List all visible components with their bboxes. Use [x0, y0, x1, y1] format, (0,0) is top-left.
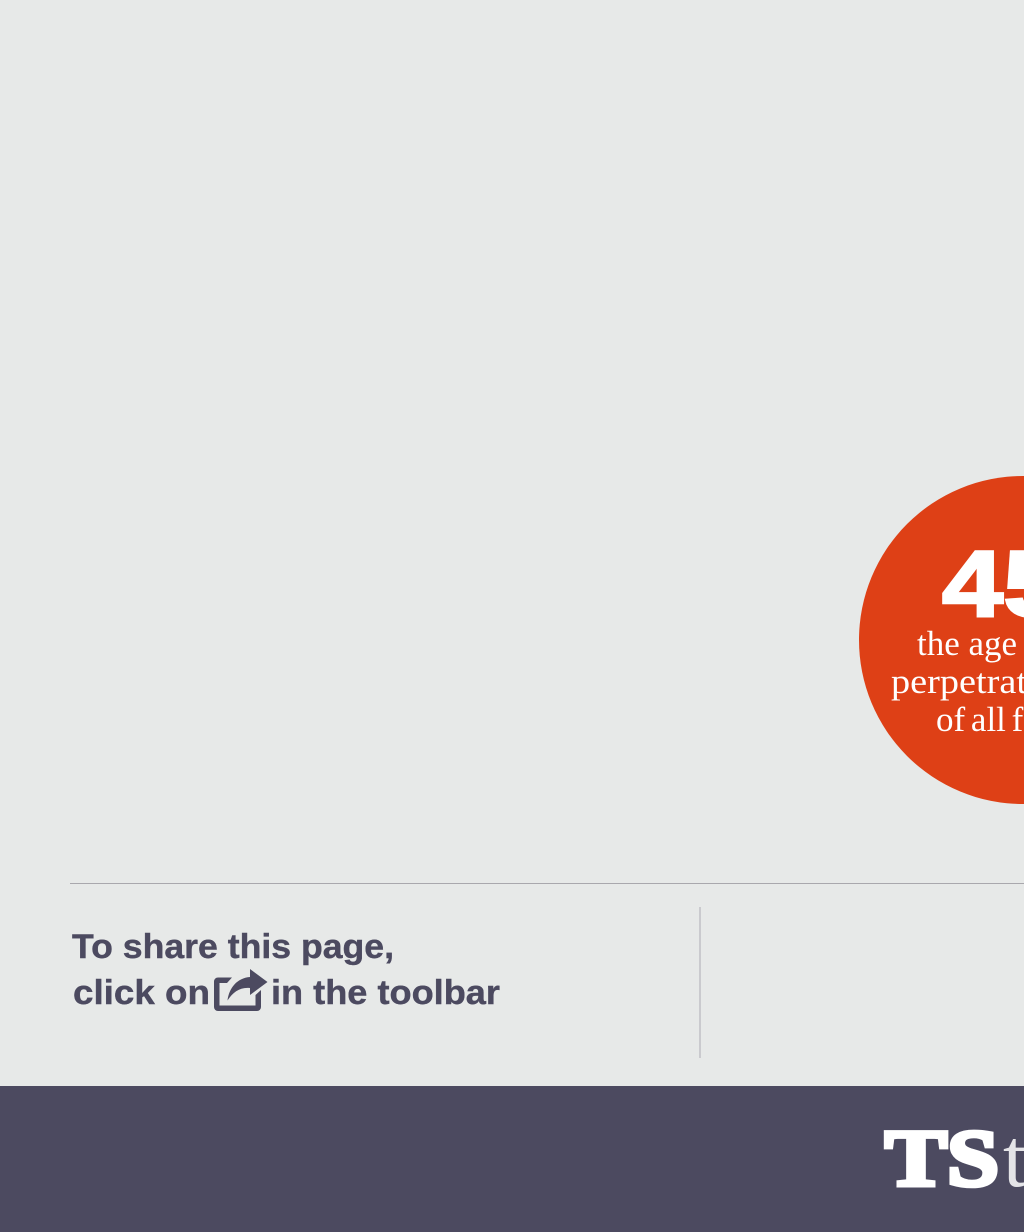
statistic description: of all f	[936, 700, 1024, 739]
statistic description: the age	[917, 624, 1017, 663]
footer bar	[0, 1086, 1024, 1232]
share instructions	[72, 928, 500, 1012]
share text line 2 start: click on	[73, 974, 210, 1012]
statistic description	[891, 624, 1024, 739]
statistic description: perpetrat	[891, 662, 1024, 701]
icon: share arrow	[214, 969, 268, 1011]
share text line 1: To share this page,	[72, 928, 394, 966]
callout: orange statistic circle	[859, 476, 1024, 804]
logo: TS	[885, 1115, 999, 1203]
logo	[885, 1112, 1024, 1205]
share text line 2 end: in the toolbar	[271, 974, 500, 1012]
